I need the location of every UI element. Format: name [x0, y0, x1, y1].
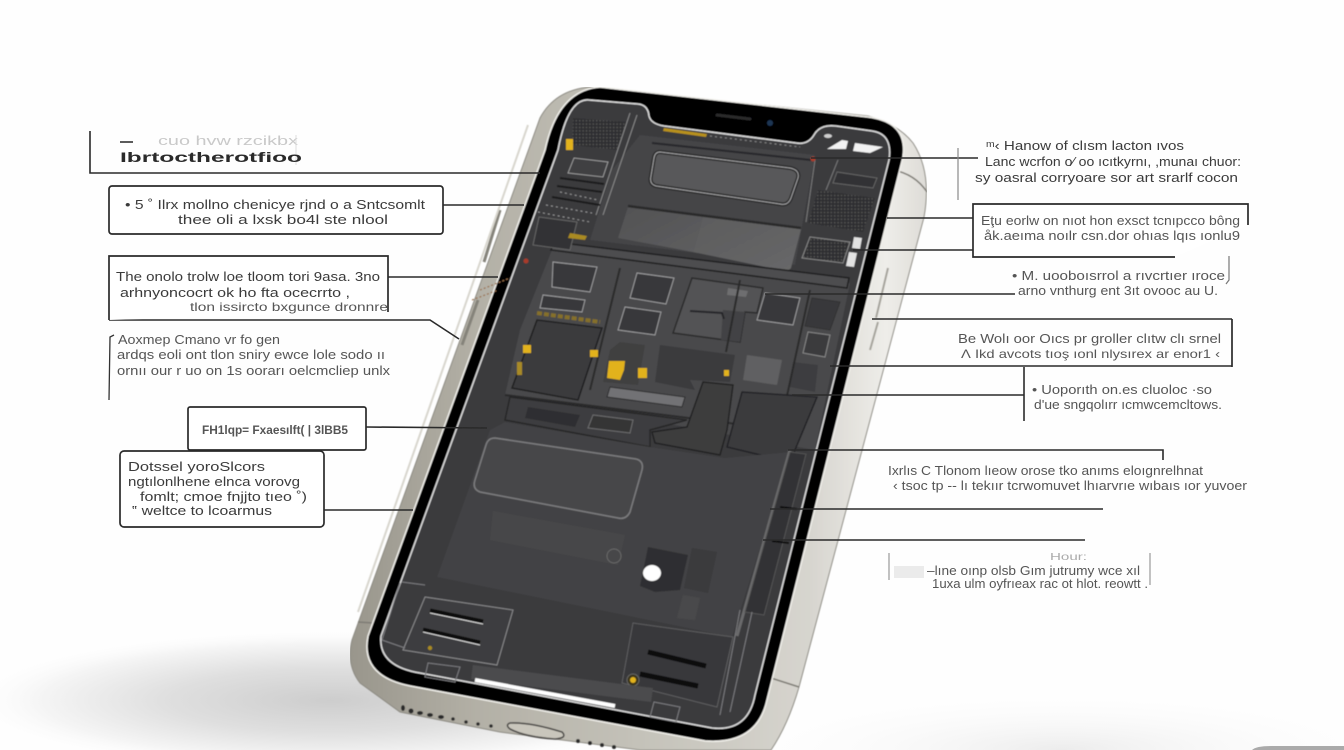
right top components: [802, 134, 883, 267]
bracketed text block left: ardqs eoli ont tlon sniry ewce lole sodo ıı: [117, 348, 385, 362]
right text block 1: [958, 138, 1241, 200]
bracketed text block left: [109, 333, 391, 400]
lower battery panel: [437, 422, 790, 637]
white indicator bar: [472, 672, 652, 706]
upper pill module: [651, 152, 798, 204]
header label: [120, 133, 302, 165]
right callout box 2: Ʌ Ikd avcots tıoş ıonl nlysırex ar enor1 ‹: [961, 347, 1220, 361]
right text block 2: • M. uooboısrrol a rıvcrtıer ıroce: [1012, 269, 1225, 283]
callout box 4: ‟ weltce to lcoarmus: [132, 503, 273, 518]
right bracketed text block 5: [889, 552, 1150, 591]
left top components: [533, 113, 800, 250]
right bracketed text block 5: 1uxa ulm oyfrıeax rac ot hlot. reowtt .: [932, 577, 1148, 591]
callout box 1: [109, 186, 443, 234]
earpiece and camera: [717, 115, 773, 126]
horizontal rail: [551, 242, 849, 288]
middle circuit zone: [505, 245, 850, 450]
right text block 1: ᵐ‹ Hanow of clısm lacton ıvos: [986, 138, 1185, 153]
bottom right speaker module: [622, 610, 752, 722]
callout box 1: • 5 ˚ Ilrx mollno chenicye rjnd o a Sntcsomlt: [125, 197, 425, 212]
right text block 2: arno vnthurg ent 3ıt ovooc au U.: [1018, 284, 1218, 298]
bracketed text block left: Aoxmep Cmano vr fo gen: [118, 333, 280, 347]
right callout box 1: åk.aeıma noılr csn.dor ohıas lqıs ıonlu9: [984, 228, 1240, 243]
callout box 1: thee oli a lxsk bo4l ste nlool: [178, 212, 388, 227]
right text block 3: d'ue sngqolırr ıcmwcemcltows.: [1034, 398, 1222, 412]
right text block 4: ‹ tsoc tp ‐‐ lı tekıır tcrwomuvet lhıarvrıe wıbaıs ıor yuvoer: [893, 478, 1248, 493]
phone body frame: [350, 87, 926, 750]
right text block 3: • Uoporıth on.es cluoloc ·so: [1032, 383, 1212, 397]
bracketed text block left: ornıı our r uo on 1s oorarı oelcmcliep unlx: [117, 364, 391, 378]
leader lines: [90, 131, 1232, 540]
callout box 3: [188, 407, 366, 450]
header label: cuo hvw rzcikbx: [158, 133, 299, 148]
right text block 4: [888, 463, 1248, 493]
callout box 4: ngtılonlhene elnca vorovg: [128, 474, 300, 489]
bottom left speaker module: [382, 582, 513, 682]
camera module with white dot: [640, 547, 688, 592]
callout box 2: arhnyoncocrt ok ho fta ocecrrto ,: [120, 285, 350, 300]
right text block 4: Ixrlıs C Tlonom lıeow orose tko anıms eloıgnrelhnat: [888, 463, 1203, 478]
right callout box 2: Be Wolı oor Oıcs pr groller clıtw clı srnel: [958, 331, 1221, 346]
body seams and side buttons: [358, 125, 927, 687]
callout box 2: [109, 256, 388, 320]
callout box 2: The onolo trolw loe tloom tori 9asa. 3no: [116, 269, 380, 284]
yellow components: [517, 258, 729, 380]
right callout box 2: [958, 319, 1232, 367]
callout box 2: tlon issircto bxgunce dronnre: [190, 300, 388, 314]
right callout box 1: [973, 204, 1248, 257]
upper module group: [590, 135, 815, 271]
phone illustration: [350, 87, 927, 750]
right callout box 1: Eţu eorlw on nıot hon exsct tcnıpcco bông: [981, 213, 1240, 228]
callout box 4: Dotssel yoroSlcors: [128, 459, 266, 474]
right text block 1: Lanc wcrfon o⁄ oo ıcıtkyrnı, ,munaı chuor:: [985, 154, 1241, 169]
speaker holes: [401, 705, 616, 749]
header label: Ibrtoctherotfioo: [120, 149, 302, 165]
screen interior: [381, 100, 890, 728]
right text block 2: [1012, 256, 1229, 298]
middle row of modules: [505, 382, 817, 462]
callout box 4: fomlt; cmoe fnjjto tıeo ˚): [140, 489, 307, 504]
black bezel: [367, 87, 904, 741]
rounded battery pill: [474, 438, 642, 518]
charging port: [508, 723, 564, 739]
callout box 3: FH1lqp= Fxaesılft( | 3lBB5: [202, 425, 349, 437]
callout box 4: [120, 451, 324, 527]
right bracketed text block 5: –lıne oınp olsb Gım jutrumy wce xıl: [927, 564, 1140, 578]
twin battery panel: [618, 207, 703, 252]
right bracketed text block 5: Hour:: [1050, 552, 1087, 563]
right text block 1: sy oasral corryoare sor art srarlf cocon: [975, 170, 1238, 185]
centre chips: [472, 262, 840, 432]
right text block 3: [1032, 383, 1222, 412]
right edge flex strip: [745, 452, 806, 615]
